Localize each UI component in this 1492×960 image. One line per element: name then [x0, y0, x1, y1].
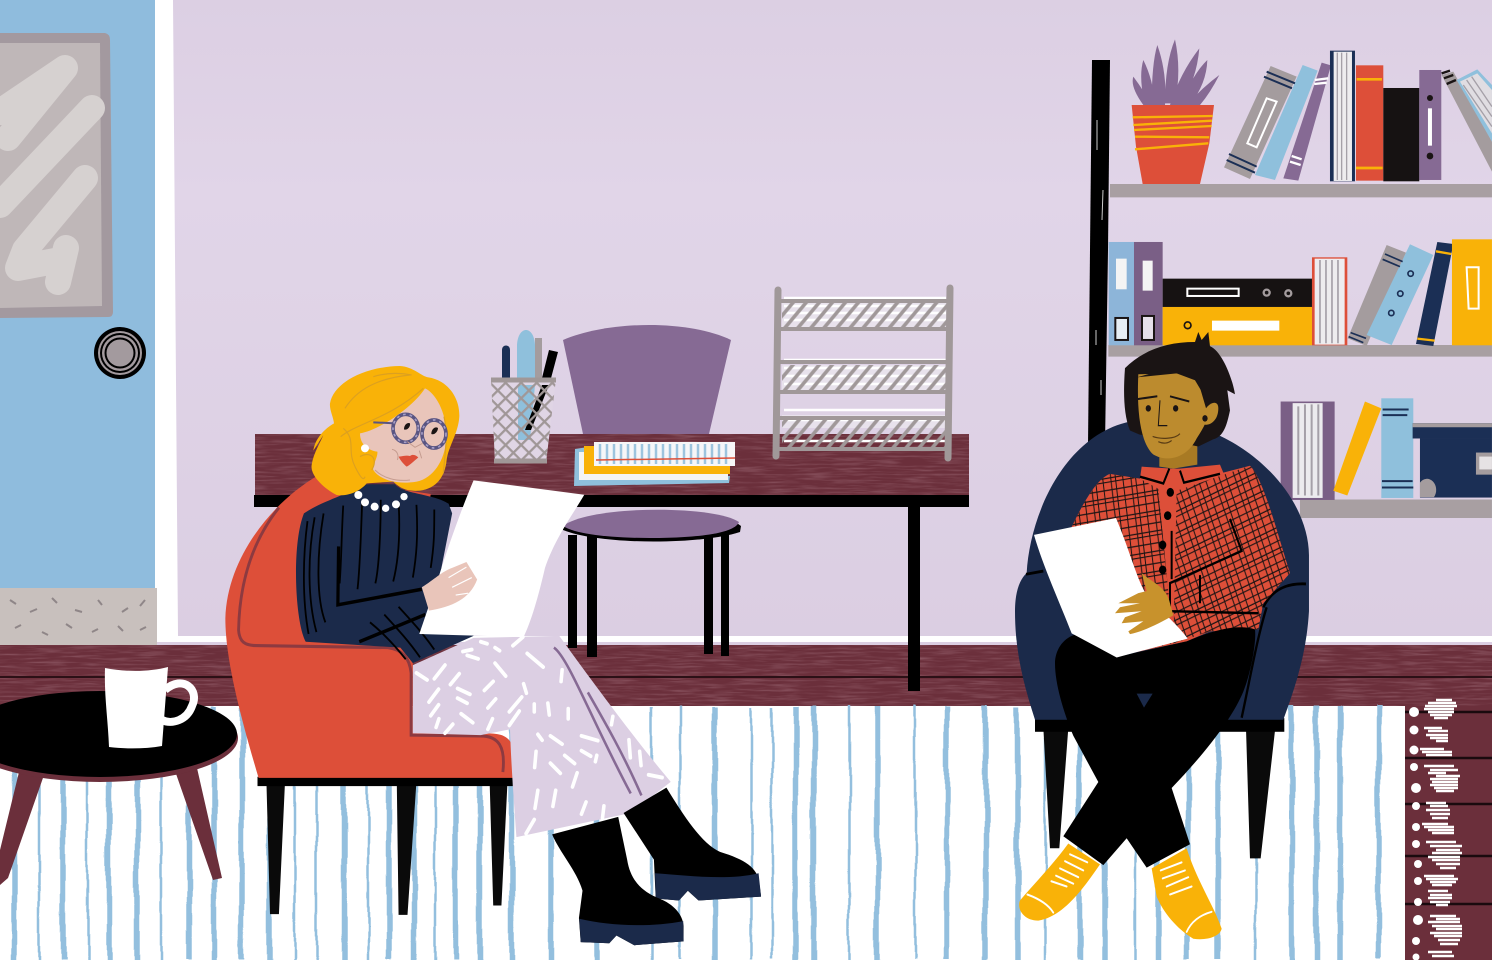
- desk leg: [908, 505, 920, 691]
- rug: [0, 706, 1405, 960]
- purple chair: [563, 325, 741, 657]
- man's head: [1124, 332, 1235, 469]
- neck: [1159, 443, 1197, 469]
- chair back: [563, 325, 731, 434]
- shirt: [1063, 465, 1290, 656]
- ear: [1202, 403, 1218, 425]
- door knob: [94, 327, 146, 379]
- door window: [0, 33, 113, 318]
- chair legs: [568, 535, 729, 657]
- nose and wrinkles: [375, 442, 423, 480]
- skirt: [413, 636, 671, 837]
- man's hand: [1115, 573, 1173, 634]
- plant: [1132, 39, 1219, 184]
- door frame: [153, 0, 1492, 642]
- table top: [0, 694, 238, 782]
- pens: [502, 346, 510, 380]
- hair: [1124, 332, 1235, 447]
- wall: [150, 0, 1492, 645]
- shelf post: [1088, 60, 1110, 445]
- face: [360, 388, 446, 483]
- man in navy armchair: [1015, 332, 1309, 939]
- woman's hand: [422, 562, 477, 611]
- floor right of rug: [1405, 706, 1492, 960]
- table legs: [0, 768, 222, 885]
- chair seam lines: [239, 508, 503, 772]
- top row books: [1224, 51, 1492, 181]
- lower row books: [1281, 398, 1492, 500]
- mesh cup: [491, 379, 556, 463]
- rug stripes: [15, 706, 1378, 960]
- back boot: [624, 788, 761, 900]
- lips: [399, 455, 418, 467]
- navy chair legs: [1035, 718, 1284, 858]
- yellow socks: [1019, 843, 1222, 939]
- red armchair: [225, 476, 513, 778]
- second row books: [1109, 239, 1492, 346]
- coffee table: [0, 667, 238, 885]
- paper held by woman: [419, 480, 584, 637]
- shirt collar and buttons: [1140, 469, 1258, 613]
- hair strands: [341, 373, 446, 479]
- lower shelf board: [1300, 500, 1492, 518]
- front boot: [552, 817, 684, 945]
- hair: [312, 366, 459, 495]
- woman in red armchair: [225, 366, 761, 945]
- pen holder: [491, 330, 558, 463]
- door: [0, 0, 155, 590]
- door mat threshold: [0, 588, 157, 646]
- lower shelf and books: [1281, 398, 1492, 518]
- facial features: [1137, 396, 1189, 443]
- glasses: [373, 414, 446, 448]
- bookshelf: [1088, 39, 1492, 518]
- paper held by man: [1034, 518, 1188, 657]
- boots: [552, 788, 761, 945]
- fringe tassels: [1420, 700, 1462, 956]
- earring: [361, 444, 369, 452]
- floor: [0, 645, 1492, 707]
- paper stacks on desk: [574, 442, 735, 486]
- woman's head: [312, 366, 459, 512]
- desk: [254, 434, 969, 691]
- shelf boards: [1108, 184, 1492, 357]
- rug fringe: [1409, 700, 1462, 960]
- red chair legs: [257, 777, 513, 915]
- hair fringe: [1137, 366, 1203, 394]
- fringe dots: [1409, 707, 1423, 960]
- face: [1138, 373, 1207, 458]
- wire paper tray: [776, 288, 950, 458]
- upper shelves and books: [1108, 39, 1492, 357]
- pearl necklace: [354, 491, 408, 512]
- sweater: [296, 484, 474, 663]
- chair seat: [563, 510, 741, 542]
- trousers: [1055, 627, 1255, 868]
- navy armchair: [1015, 419, 1309, 720]
- mug: [105, 667, 194, 748]
- eyes: [404, 423, 438, 434]
